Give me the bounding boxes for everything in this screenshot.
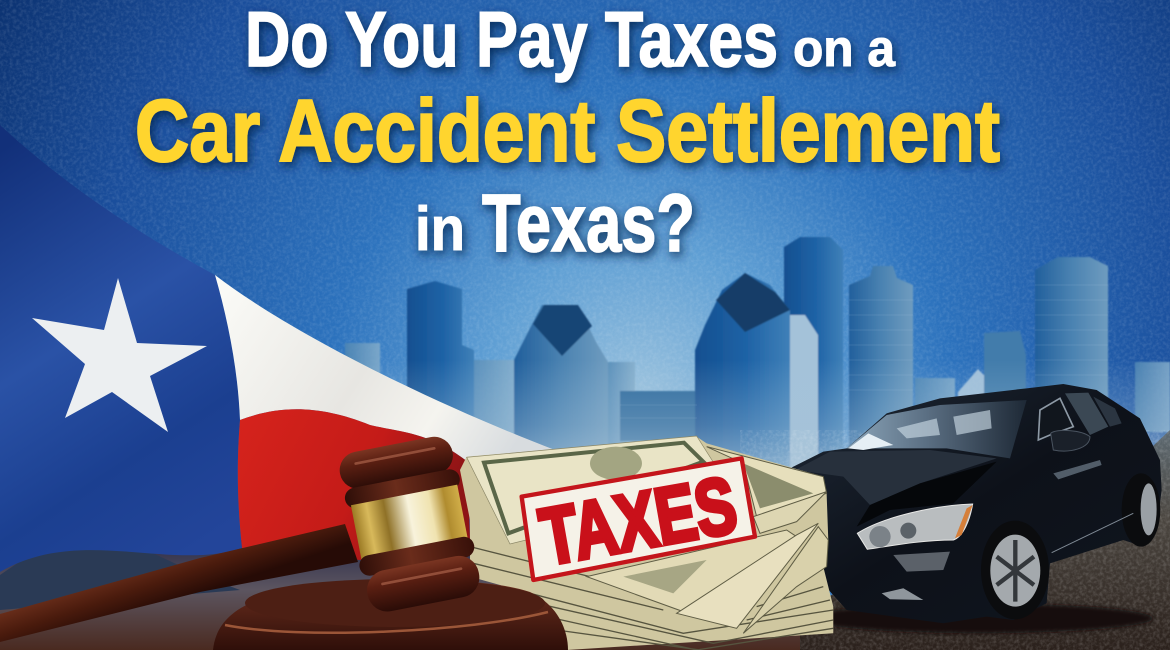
flag: blue field xyxy=(0,125,242,572)
title xyxy=(135,0,1000,269)
city skyline xyxy=(345,237,1170,480)
side window middle xyxy=(1065,393,1108,435)
bottom cap xyxy=(364,552,483,615)
side window front xyxy=(1038,398,1073,440)
top bill xyxy=(467,436,743,544)
fog lamp xyxy=(882,588,923,600)
front rim spokes xyxy=(997,540,1034,602)
headlight amber xyxy=(955,505,973,538)
tower: tall right xyxy=(1035,257,1108,410)
headlight lens xyxy=(869,526,891,547)
rear bill xyxy=(707,447,827,517)
bumper reflection xyxy=(893,552,950,572)
flag: white star xyxy=(32,278,207,432)
hood panel xyxy=(795,450,997,505)
gavel handle xyxy=(0,524,358,642)
gavel head xyxy=(336,433,483,616)
side mirror xyxy=(1051,430,1090,451)
gloss highlights xyxy=(356,448,461,585)
window lines on towers xyxy=(620,285,1108,418)
upper collar xyxy=(343,468,462,510)
lower collar xyxy=(358,535,476,578)
tower: dark notched crown xyxy=(695,273,790,470)
car body xyxy=(787,384,1162,623)
ground: road at right xyxy=(740,430,1170,650)
wrecked car xyxy=(787,384,1162,633)
flag: white stripe xyxy=(215,275,555,462)
bill engraving xyxy=(484,443,703,533)
title line 1 end: on a xyxy=(793,20,896,78)
texas flag xyxy=(0,125,555,572)
road grain xyxy=(740,430,1170,650)
tower: small right xyxy=(984,331,1026,400)
rear rim xyxy=(1141,483,1157,535)
car shadow xyxy=(807,603,1153,633)
sill highlight xyxy=(1052,513,1133,553)
tower: low block xyxy=(620,391,697,441)
fanned bill xyxy=(677,523,818,628)
dark mountain behind flag xyxy=(0,528,240,610)
fanned bill xyxy=(743,527,828,633)
door reflection xyxy=(1053,460,1102,479)
engraving on fanned bill xyxy=(623,560,707,593)
title line 3 end: Texas? xyxy=(482,178,695,269)
tower: stepped xyxy=(849,266,913,470)
headlight lens xyxy=(900,523,916,539)
headlight xyxy=(857,504,973,549)
low skyline haze xyxy=(330,360,1170,490)
rear wheel xyxy=(1122,473,1160,547)
sound block xyxy=(213,579,568,650)
title line 2: Car Accident Settlement xyxy=(135,81,1000,180)
tower: left slab xyxy=(407,281,474,470)
ground: left foreground xyxy=(0,540,800,650)
side window rear xyxy=(1093,397,1122,427)
tower: notched crown xyxy=(514,305,608,470)
bill portrait xyxy=(590,447,642,480)
top cap xyxy=(336,434,456,492)
windshield xyxy=(847,400,1027,458)
front rim xyxy=(990,535,1040,607)
stamp text: TAXES xyxy=(534,460,743,582)
stamp xyxy=(522,458,755,582)
flag: red stripe xyxy=(238,409,470,560)
fanned bill xyxy=(587,530,797,612)
title line 3 start: in xyxy=(415,195,465,264)
cracked glass patch xyxy=(848,433,893,450)
tower: pale front slab xyxy=(790,315,818,470)
bill edge layers xyxy=(470,547,833,650)
block top xyxy=(245,579,545,627)
money stack xyxy=(460,436,833,650)
block rim xyxy=(225,612,548,633)
frost patches xyxy=(897,410,992,438)
crumpled hood gap xyxy=(857,462,997,527)
gavel xyxy=(0,433,483,642)
sky grain texture xyxy=(0,0,1170,460)
lower rear bill xyxy=(753,492,827,533)
engraving on rear bill xyxy=(743,463,813,508)
stack of bills xyxy=(460,437,833,650)
distant buildings xyxy=(345,343,1170,480)
tower: tall rear xyxy=(784,237,843,470)
gold band xyxy=(351,485,468,559)
front wheel xyxy=(981,521,1049,619)
